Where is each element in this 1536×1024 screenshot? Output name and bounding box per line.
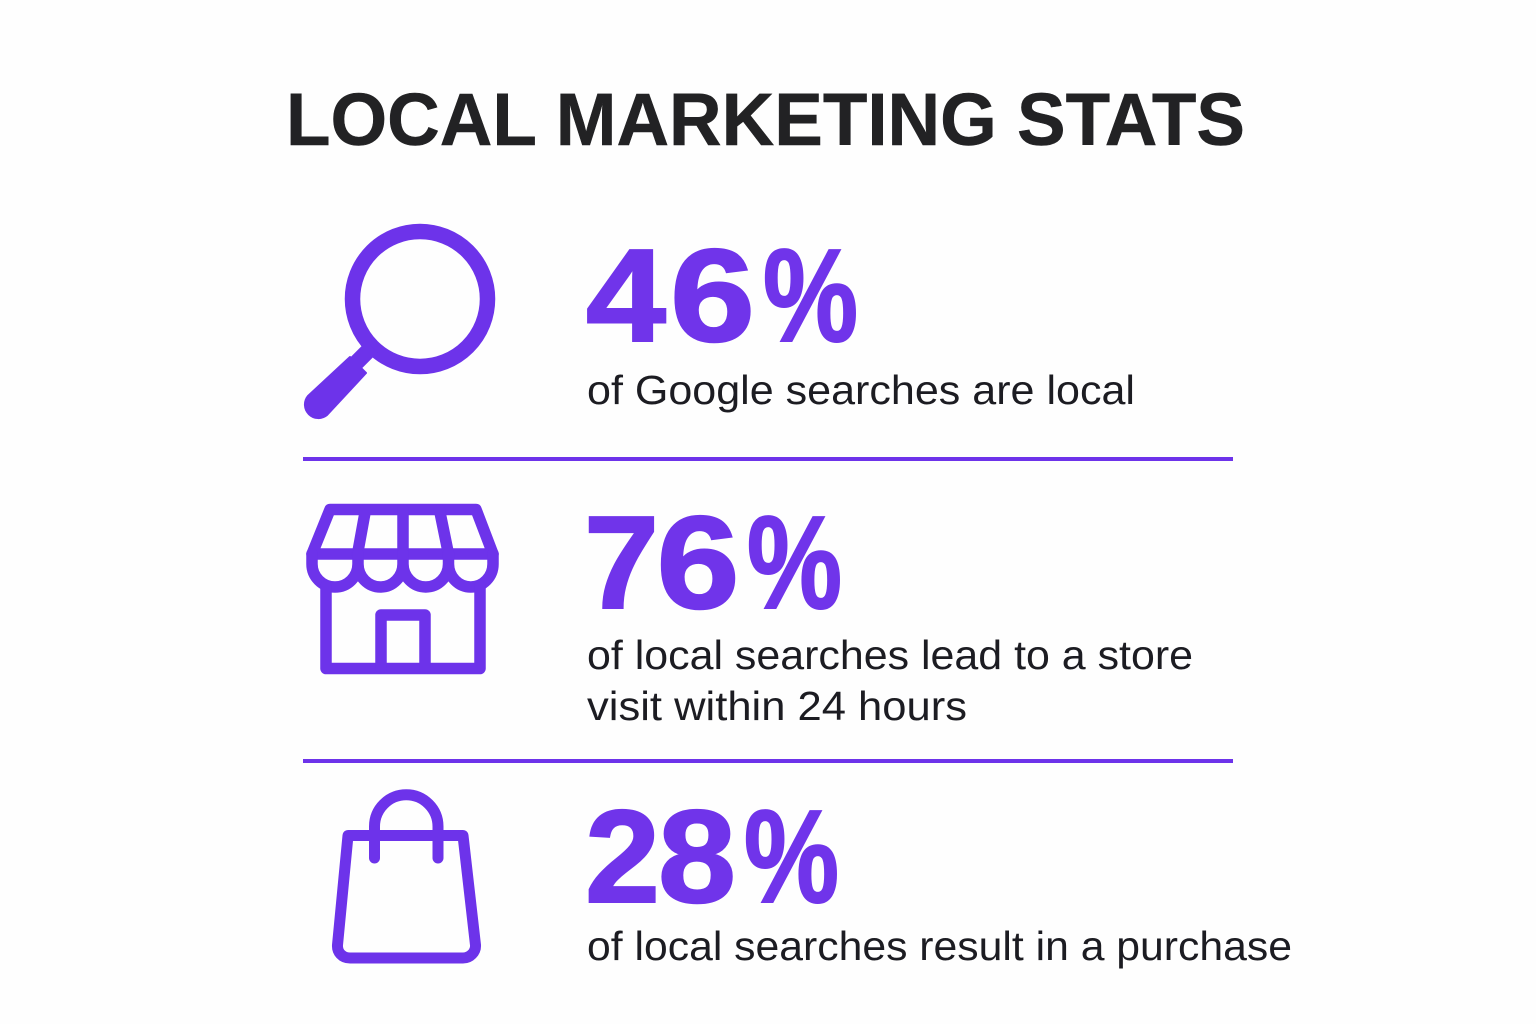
title: LOCAL MARKETING STATS (286, 78, 1245, 161)
icon: magnifying glass (305, 232, 488, 418)
stat value 46%: 4 (586, 222, 666, 369)
stat value 46%: 6 (670, 222, 755, 369)
stat value 76%: 6 (656, 489, 740, 636)
stat value 28%: 2 (585, 783, 660, 930)
stat description: of local searches lead to a store (587, 632, 1193, 678)
stat description second line: visit within 24 hours (587, 683, 967, 729)
stat description: of Google searches are local (587, 367, 1135, 413)
stat value 28%: 8 (658, 783, 736, 930)
stat value 76%: 7 (584, 489, 659, 636)
stat value 28%: % (744, 783, 839, 930)
icon: shopping bag (337, 795, 476, 958)
icon: storefront (312, 510, 493, 668)
panel: stat 46% (305, 222, 1135, 418)
panel: stat 28% (337, 783, 1292, 969)
stat value 28% (585, 783, 839, 930)
stat value 46%: % (763, 222, 858, 369)
panel: stat 76% (312, 489, 1193, 729)
stat value 76%: % (747, 489, 842, 636)
stat value 46% (586, 222, 858, 369)
stat description: of local searches result in a purchase (587, 923, 1292, 969)
stat value 76% (584, 489, 842, 636)
